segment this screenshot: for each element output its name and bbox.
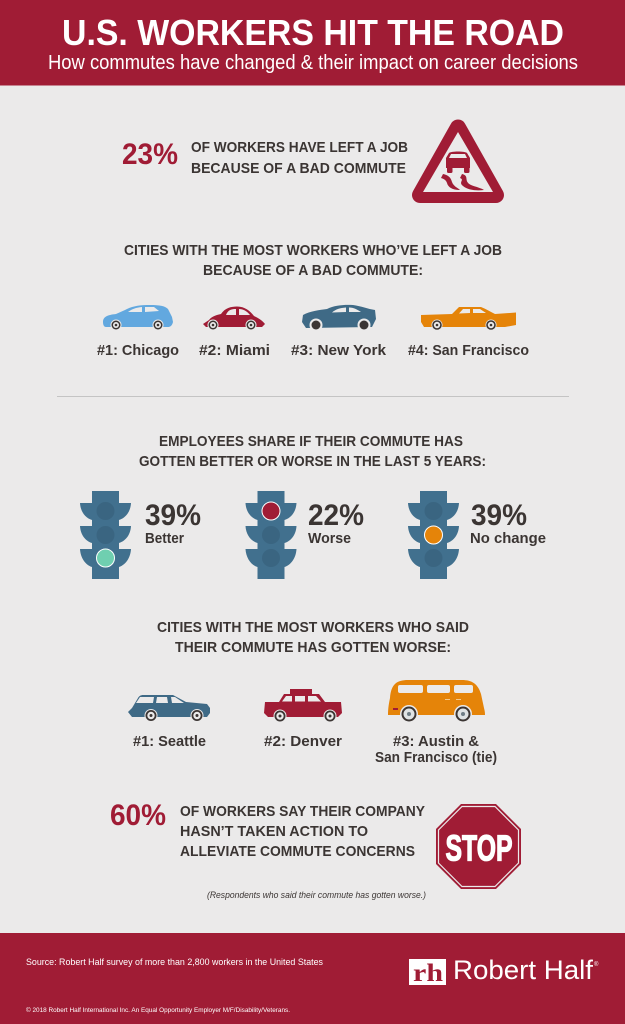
statement: HASN’T TAKEN ACTION TO	[180, 823, 368, 840]
statement: BECAUSE OF A BAD COMMUTE	[191, 160, 406, 177]
icon: red beetle, Miami	[203, 306, 265, 330]
stat: 39 percent better	[145, 499, 201, 547]
city labels: first list: #1: Chicago	[97, 342, 179, 359]
percentage: 23%	[122, 138, 178, 171]
statement: ALLEVIATE COMMUTE CONCERNS	[180, 843, 415, 860]
copyright: © 2018 Robert Half International Inc. An Equal Opportunity Employer M/F/Disability/Veterans.	[26, 1007, 290, 1014]
icon: stop sign: STOP	[446, 828, 512, 868]
footer band	[0, 933, 625, 1024]
footnote: (Respondents who said their commute has gotten worse.)	[207, 890, 426, 900]
stat: 39 percent no change: 39%	[471, 499, 527, 532]
stat: 22 percent worse: 22%	[308, 499, 364, 532]
heading: commute better or worse	[139, 433, 486, 470]
logo: Robert Half: ®	[594, 961, 599, 968]
icon: traffic light, green	[80, 491, 131, 579]
stat: 60 percent no action	[110, 799, 425, 860]
heading: cities where workers left a job	[124, 242, 502, 279]
icon: blue car, Chicago	[103, 305, 173, 330]
city labels: first list: #4: San Francisco	[408, 342, 529, 359]
city labels: second list: San Francisco (tie)	[375, 749, 497, 766]
icon: orange van, Austin and San Francisco	[388, 680, 485, 723]
source: Source: Robert Half survey of more than 2,800 workers in the United States	[26, 957, 323, 968]
city labels: first list	[97, 342, 529, 359]
city labels: second list: #1: Seattle	[133, 733, 206, 750]
city labels: second list	[133, 733, 497, 766]
icon: stop sign	[436, 804, 521, 889]
title: U.S. WORKERS HIT THE ROAD	[62, 12, 564, 53]
heading: commute better or worse: EMPLOYEES SHARE IF THEIR COMMUTE HAS	[159, 433, 463, 450]
heading: cities where workers left a job: CITIES WITH THE MOST WORKERS WHO’VE LEFT A JOB	[124, 242, 502, 259]
stat: 39 percent no change	[470, 499, 546, 547]
statement	[180, 803, 425, 860]
icon: orange classic car, San Francisco	[421, 307, 516, 330]
city labels: second list: #3: Austin &	[393, 733, 479, 750]
icon: blue sedan, New York	[302, 305, 376, 332]
stat: 22 percent worse: Worse	[308, 530, 351, 547]
city labels: second list: #2: Denver	[264, 733, 342, 750]
icon: red taxi, Denver	[264, 689, 342, 722]
heading: cities where commute got worse: THEIR COMMUTE HAS GOTTEN WORSE:	[175, 639, 451, 656]
heading: cities where commute got worse	[157, 619, 469, 656]
statement: OF WORKERS SAY THEIR COMPANY	[180, 803, 425, 820]
stat: 39 percent no change: No change	[470, 530, 546, 547]
icon: slippery road warning sign	[420, 128, 496, 195]
header band	[0, 0, 625, 86]
icon: blue station wagon, Seattle	[128, 695, 210, 722]
logo: Robert Half	[409, 955, 599, 987]
heading: commute better or worse: GOTTEN BETTER OR WORSE IN THE LAST 5 YEARS:	[139, 453, 486, 470]
icon: traffic light, orange	[408, 491, 459, 579]
heading: cities where commute got worse: CITIES WITH THE MOST WORKERS WHO SAID	[157, 619, 469, 636]
city labels: first list: #2: Miami	[199, 342, 270, 359]
logo: Robert Half: Robert Half	[453, 955, 594, 985]
stat: 39 percent better: 39%	[145, 499, 201, 532]
stat: 39 percent better: Better	[145, 530, 184, 547]
subtitle: How commutes have changed & their impact on career decisions	[48, 52, 578, 74]
heading: cities where workers left a job: BECAUSE OF A BAD COMMUTE:	[203, 262, 423, 279]
logo: Robert Half: rh	[413, 960, 443, 987]
stat: 22 percent worse	[308, 499, 364, 547]
stat: 23 percent left a job	[122, 138, 408, 177]
statement	[191, 139, 408, 177]
percentage: 60%	[110, 799, 166, 832]
statement: OF WORKERS HAVE LEFT A JOB	[191, 139, 408, 156]
icon: traffic light, red	[246, 491, 296, 579]
city labels: first list: #3: New York	[291, 342, 387, 359]
